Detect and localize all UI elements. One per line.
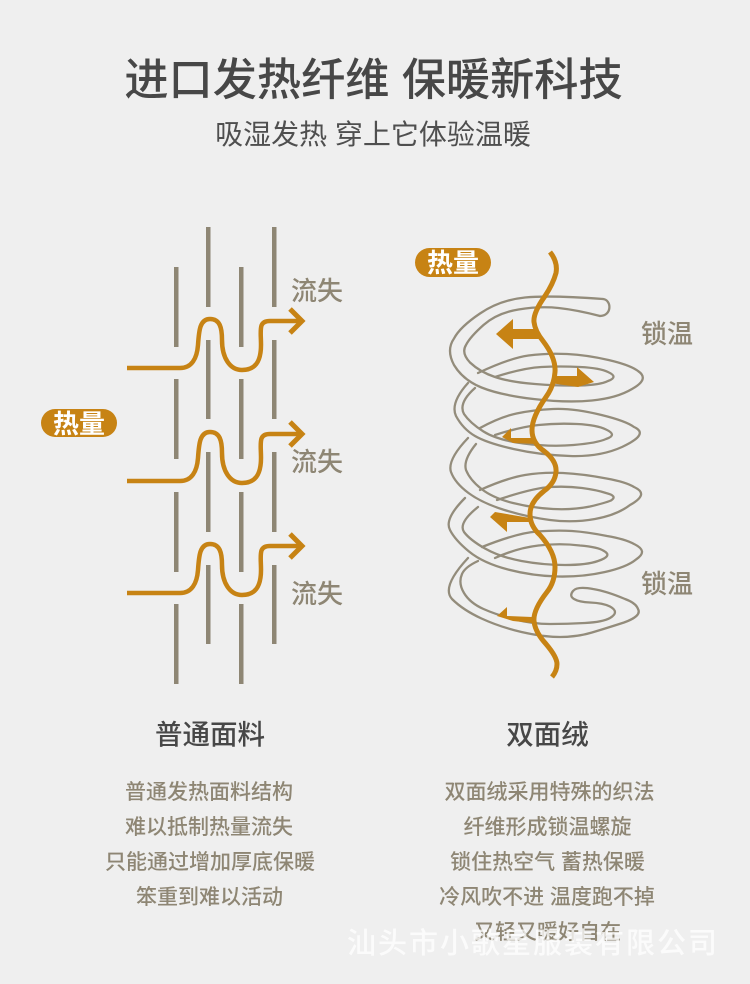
label: heat loss middle: 流失 [291,447,343,477]
badge: heat left [41,409,117,439]
text block: double-faced fleece description: 冷风吹不进 温度跑不掉 [439,886,655,909]
heading: double-faced fleece: 双面绒 [506,719,589,750]
heat arrow: top [127,309,302,370]
badge: heat right: 热量 [427,248,479,278]
panel: ordinary fabric diagram [41,227,343,684]
badge: heat left: 热量 [53,409,105,439]
text block: ordinary fabric description: 普通发热面料结构 [125,781,293,804]
subtitle: 吸湿发热 穿上它体验温暖 [215,119,531,150]
label: lock warmth top: 锁温 [641,319,693,349]
text block: double-faced fleece description: 纤维形成锁温螺旋 [464,816,632,839]
text block: ordinary fabric description [105,781,315,909]
badge: heat right [415,248,491,278]
label: heat loss bottom: 流失 [291,579,343,609]
title: 进口发热纤维 保暖新科技 [124,56,623,105]
text block: double-faced fleece description: 又轻又暖好自在 [474,921,621,944]
text block: ordinary fabric description: 难以抵制热量流失 [125,816,293,839]
panel: double-faced fleece diagram [415,248,693,677]
heat path wave [530,252,557,677]
label: lock warmth bottom: 锁温 [641,569,693,599]
watermark: 汕头市小歌星服装有限公司 [347,927,719,960]
fibre bars [174,227,276,684]
heat retention arrows [490,319,594,623]
text block: ordinary fabric description: 笨重到难以活动 [136,886,283,909]
text block: double-faced fleece description: 双面绒采用特殊的织法 [444,781,654,804]
text block: ordinary fabric description: 只能通过增加厚底保暖 [105,851,315,874]
heat arrow: bottom [127,534,302,595]
label: heat loss top: 流失 [291,276,343,306]
heading: ordinary fabric: 普通面料 [155,719,265,750]
thermal spiral coil [449,297,643,637]
text block: double-faced fleece description [439,781,655,944]
text block: double-faced fleece description: 锁住热空气 蓄热保暖 [450,851,645,874]
heat arrow: middle [127,422,302,483]
